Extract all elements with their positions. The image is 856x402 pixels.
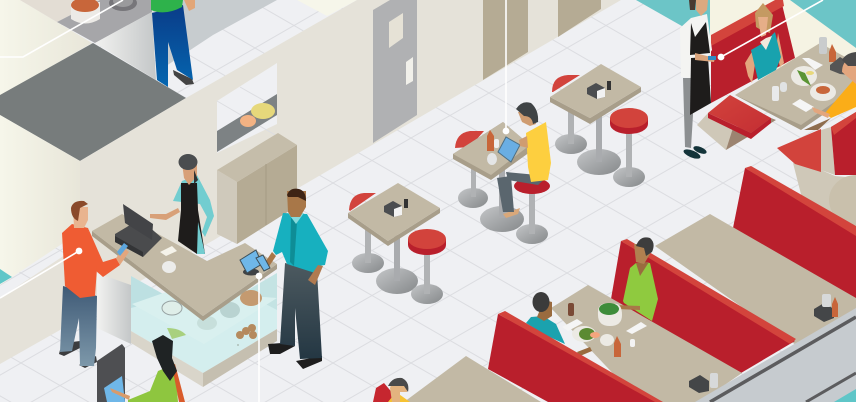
near booth back xyxy=(488,311,663,402)
front stool xyxy=(514,178,550,244)
near table xyxy=(404,356,541,402)
counter left face xyxy=(97,273,131,344)
person: kitchen worker xyxy=(151,0,195,87)
person: green top woman xyxy=(616,237,658,321)
service counter xyxy=(92,204,277,387)
cash register xyxy=(115,204,162,257)
back wall xyxy=(0,0,621,364)
tan door right xyxy=(558,0,601,37)
counter top xyxy=(92,231,277,321)
kitchen area xyxy=(0,0,357,96)
receipt xyxy=(160,246,177,256)
front stool xyxy=(610,108,648,187)
pedestal xyxy=(376,235,418,294)
dark grey roof slab xyxy=(0,43,186,161)
person: woman at kiosk xyxy=(128,335,185,402)
back stool xyxy=(552,75,587,154)
table top xyxy=(348,208,440,246)
callout dots xyxy=(76,54,724,279)
sink xyxy=(109,0,137,11)
person with tablet xyxy=(498,102,551,182)
middle table xyxy=(551,285,742,402)
person: cashier woman xyxy=(150,154,214,254)
back stool xyxy=(455,131,488,208)
person: teal shirt seated man xyxy=(526,292,592,356)
table and stools with laptop person xyxy=(453,102,551,244)
pedestal xyxy=(577,115,621,175)
tip dish xyxy=(162,261,176,273)
table and stools lower xyxy=(348,183,446,304)
napkin holder xyxy=(384,199,408,217)
far table xyxy=(655,214,856,345)
kiosk xyxy=(97,344,130,402)
pot xyxy=(71,0,100,24)
tablet stand xyxy=(243,268,259,276)
table items xyxy=(487,130,499,165)
case base xyxy=(131,331,203,387)
person legs xyxy=(497,172,548,218)
pedestal xyxy=(480,170,524,232)
service window xyxy=(217,63,277,153)
door xyxy=(373,0,417,143)
person: front booth man xyxy=(388,378,410,402)
cabinet xyxy=(217,133,297,244)
booth table items xyxy=(562,303,647,357)
middle booth back xyxy=(611,239,796,373)
diner booths xyxy=(373,166,856,402)
far booth back xyxy=(733,166,856,300)
upper right booth xyxy=(697,0,795,150)
teal exterior top right xyxy=(636,0,856,110)
pastry display case xyxy=(131,273,277,373)
person: seated orange shirt xyxy=(812,52,856,118)
table top xyxy=(550,87,641,124)
back stool xyxy=(349,193,384,273)
foreground partition xyxy=(695,308,856,402)
front stool xyxy=(408,229,446,304)
person: man in teal shirt with tablet xyxy=(240,189,328,369)
table and stools upper xyxy=(550,64,648,187)
condiment caddy far booth xyxy=(814,294,838,322)
napkin holder xyxy=(587,81,611,99)
upper right table xyxy=(735,37,856,130)
person: customer in orange xyxy=(59,201,129,368)
table top xyxy=(453,122,530,180)
person: waitress xyxy=(680,0,716,161)
lower right booth with pedestal xyxy=(777,112,856,250)
person: blonde seated woman xyxy=(745,3,784,83)
front booth corner xyxy=(373,383,400,402)
tan double door xyxy=(483,0,528,80)
condiment caddy near booth xyxy=(689,373,718,393)
table items xyxy=(772,37,850,112)
